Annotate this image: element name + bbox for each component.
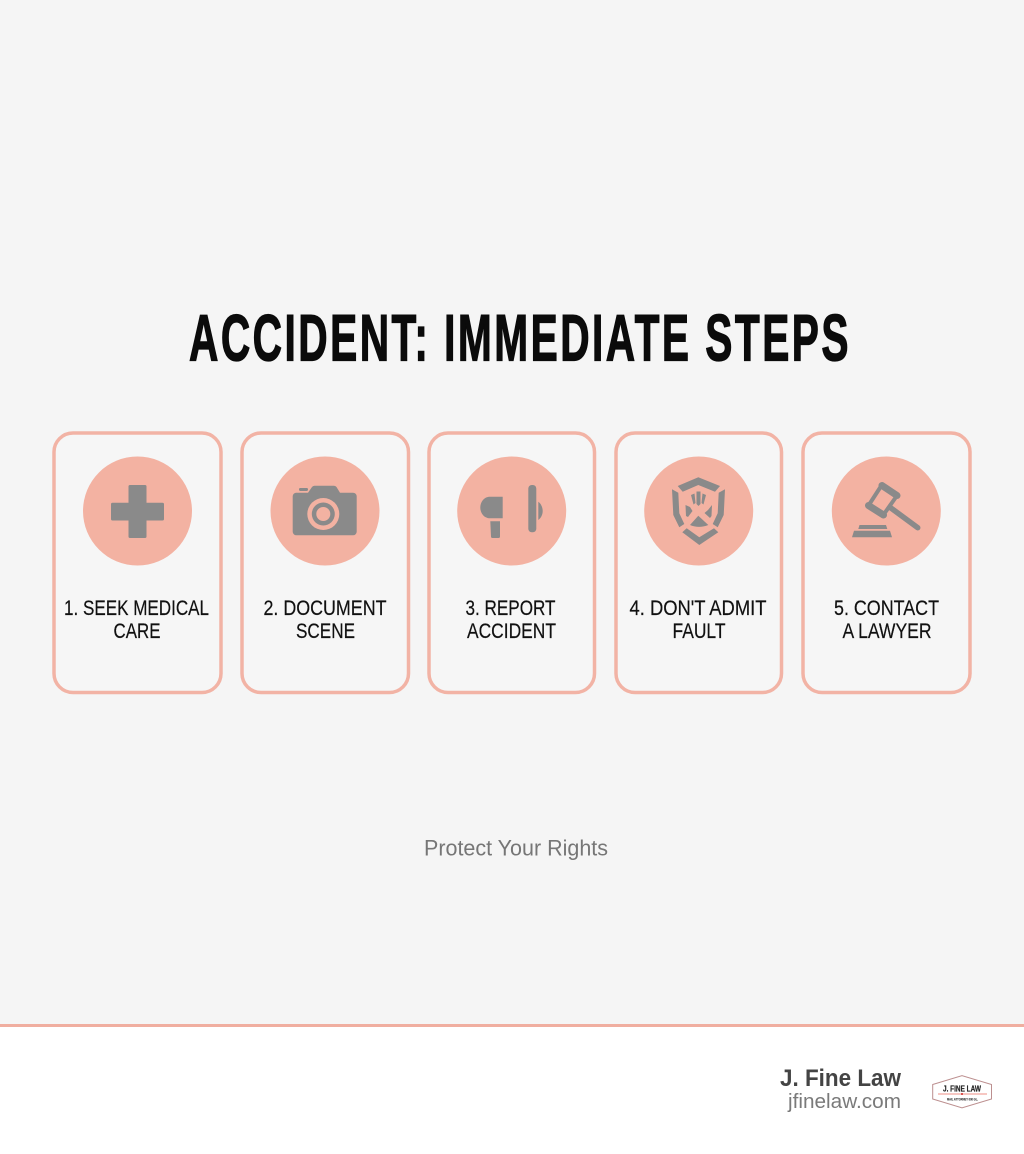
step label: 4. DON'T ADMIT (630, 597, 767, 620)
icon: crossed-out shield (672, 477, 725, 545)
step label: 1. SEEK MEDICAL (64, 597, 209, 620)
logo badge (933, 1076, 992, 1108)
step label: 2. DOCUMENT (264, 597, 387, 620)
panel: step 2 document scene (242, 433, 408, 692)
panel: step 4 don't admit fault (616, 433, 782, 692)
footer website: jfinelaw.com (787, 1091, 901, 1113)
step label: 5. CONTACT (834, 597, 939, 620)
logo badge: J. FINE LAW (943, 1084, 981, 1094)
icon: gavel (852, 486, 918, 537)
tagline: Protect Your Rights (424, 836, 608, 860)
step label: FAULT (672, 620, 726, 643)
panel: step 1 seek medical care (54, 433, 221, 692)
icon: megaphone (480, 485, 543, 538)
footer band (0, 1024, 1024, 1154)
step label: CARE (114, 620, 160, 643)
panel: step 3 report accident (429, 433, 594, 692)
icon: camera (293, 486, 357, 535)
footer firm name: J. Fine Law (780, 1065, 901, 1092)
icon: medical cross (111, 485, 164, 538)
step label: 3. REPORT (466, 597, 556, 620)
panel: step 5 contact a lawyer (803, 433, 970, 692)
step label: A LAWYER (842, 620, 932, 643)
logo badge: MAIL ATTORNEY 000 GL. (947, 1096, 978, 1102)
step label: ACCIDENT (467, 620, 556, 643)
step label: SCENE (296, 620, 355, 643)
